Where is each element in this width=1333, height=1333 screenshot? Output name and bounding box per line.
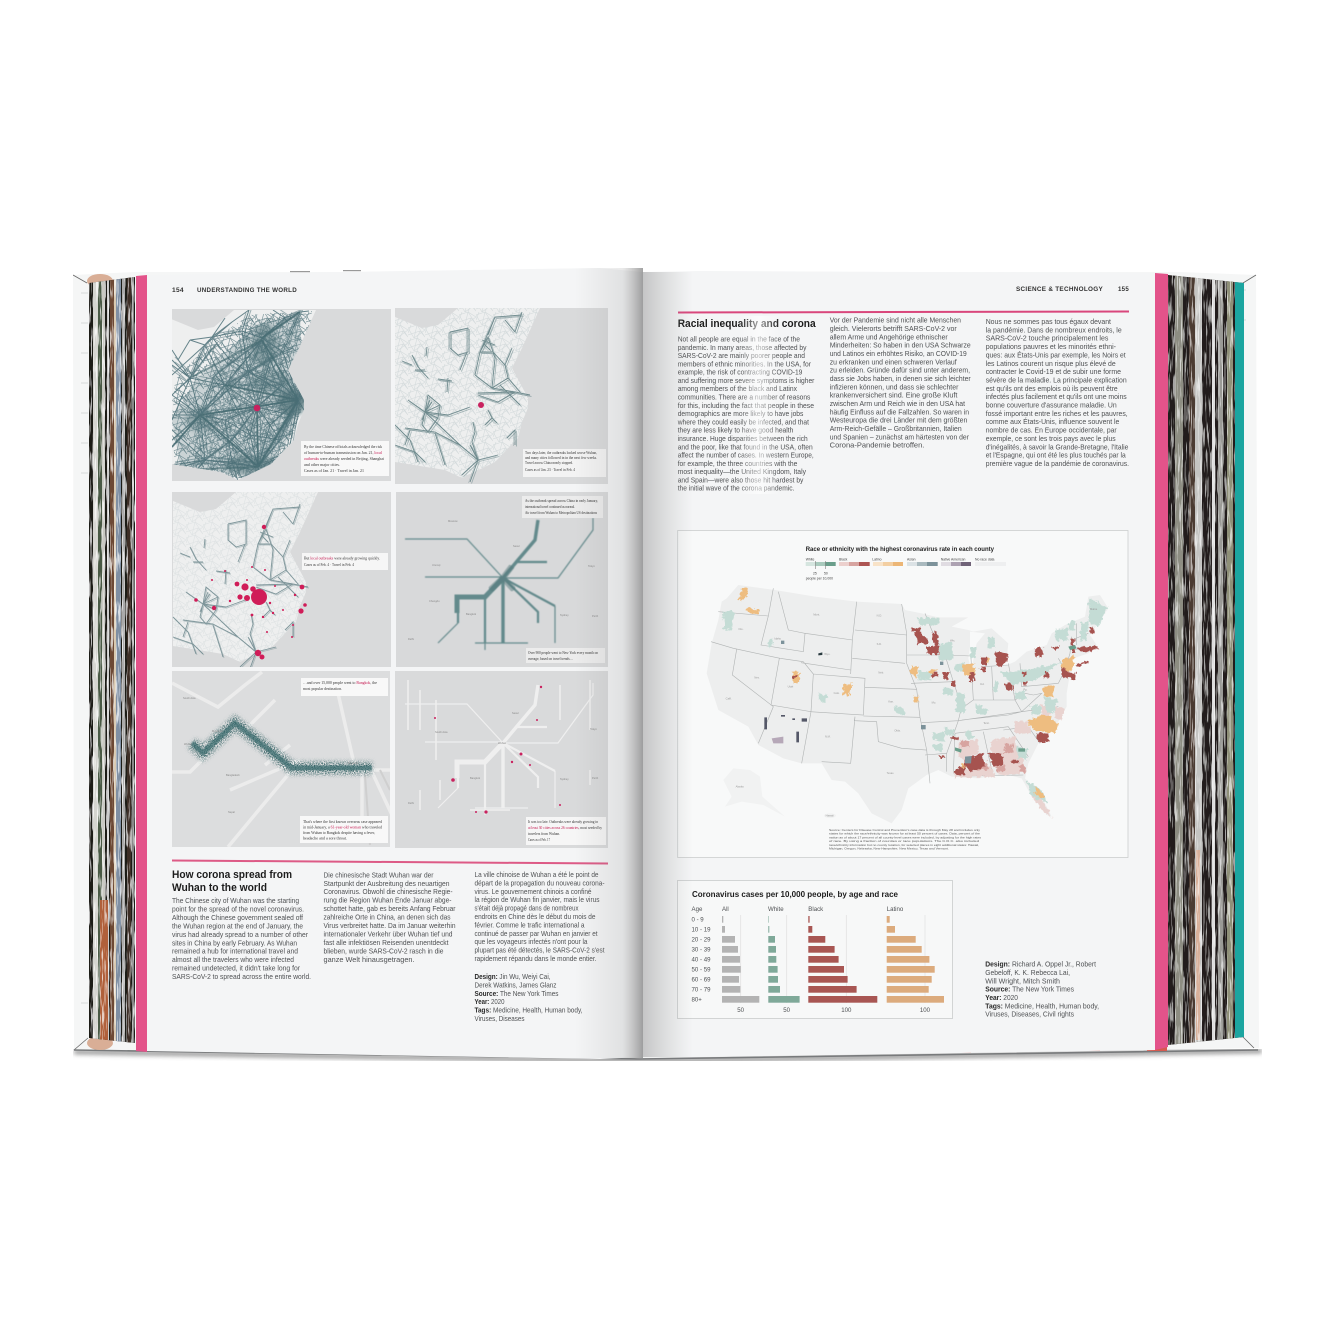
text block: English left: remained undetected, it didn't take long for bbox=[172, 964, 300, 973]
age labels: 0 - 9 bbox=[692, 917, 704, 924]
age labels: 10 - 19 bbox=[692, 927, 711, 934]
text block: English left: almost all the travelers who were infected bbox=[172, 955, 294, 964]
county colours: accents bbox=[764, 641, 1077, 763]
text block: English right: and the poor, like that found in the USA, often bbox=[678, 442, 813, 451]
text block: French right: sévère de la maladie. La principale explication bbox=[986, 376, 1127, 384]
map legend: Latino bbox=[872, 558, 882, 562]
map source note: of race. By using a fraction of counties or race populations. The C.D.C. also included bbox=[829, 839, 979, 843]
text block: German left: fast alle infektiösen Reisenden unentdeckt bbox=[324, 938, 448, 947]
text block: German right: dass sie Jobs haben, in denen sie sich leichter bbox=[830, 374, 971, 383]
credits right: Tags: Medicine, Health, Human body, bbox=[985, 1001, 1099, 1010]
caption 5b: from Wuhan to Bangkok despite having a fever, bbox=[303, 830, 375, 836]
gutter shadow right bbox=[643, 272, 693, 1057]
map panel 4: international flights star: Seoul bbox=[513, 544, 520, 548]
text block: German right: allem Arme und Angehörige ethnischer bbox=[830, 332, 948, 341]
caption 1: outbreaks were already seeded in Beijing, Shanghai bbox=[304, 456, 385, 462]
state labels: Ind. bbox=[980, 682, 985, 686]
chart column heads: All bbox=[722, 906, 729, 913]
caption 1: Cases as of Jan. 21 · Travel in Jan. 21 bbox=[304, 468, 364, 473]
text block: French right: SARS-CoV-2 touche principalement les bbox=[986, 334, 1109, 343]
map panel 6: routes in white, later outbreaks: Seoul bbox=[512, 711, 519, 715]
state labels: Tenn. bbox=[983, 721, 990, 725]
age labels: 40 - 49 bbox=[692, 957, 711, 964]
red outbreak bubbles bbox=[194, 525, 307, 660]
text block: French right: première vague de la pandémie de coronavirus. bbox=[986, 459, 1129, 468]
map panel 4: international flights star: Urumqi bbox=[432, 563, 441, 567]
map legend: 25 bbox=[813, 572, 817, 576]
text block: French right bbox=[986, 317, 1129, 468]
map panel 1: network, Jan 21 bbox=[169, 307, 391, 484]
caption 4a: Air travel from Wuhan to Metropolitan US destinations bbox=[525, 510, 597, 515]
caption 5b: headache and a sore throat. bbox=[303, 836, 347, 840]
state labels: S.D. bbox=[877, 642, 882, 646]
axis values: 50 bbox=[783, 1007, 791, 1014]
text block: French right: est qu'ils ont des emplois où ils peuvent être bbox=[986, 384, 1118, 393]
text block: English left: SARS-CoV-2 to spread across the entire world. bbox=[172, 972, 311, 981]
age labels: 60 - 69 bbox=[692, 977, 711, 984]
text block: German left bbox=[324, 870, 456, 964]
text block: French left: février. Comme le trafic international a bbox=[474, 920, 585, 929]
text block: German left: ganze Welt hinausgetragen. bbox=[324, 955, 414, 964]
map panel 4: international flights star: Perth bbox=[592, 614, 599, 618]
caption 3: Cases as of Feb. 4 · Travel in Feb. 4 bbox=[304, 562, 354, 567]
credits right: Design: Richard A. Oppel Jr., Robert bbox=[985, 960, 1096, 969]
map source note: race/ethnicity information but no county location, for selected places in eight additional states: Hawaii, bbox=[829, 843, 979, 847]
text block: German right: Arm-Reich-Gefälle – Großbritannien, Italien bbox=[830, 424, 962, 433]
chart column heads bbox=[692, 906, 904, 913]
state labels: Idaho bbox=[774, 636, 782, 640]
caption 4b: average, based on travel trends… bbox=[528, 656, 573, 662]
axis values bbox=[737, 1007, 931, 1014]
text block: English right: for this, including the fact that people in these bbox=[678, 401, 814, 410]
text block: English right: where they could easily be infected, and that bbox=[677, 417, 809, 426]
text block: French left: rapidement répandu dans le monde entier. bbox=[474, 954, 596, 963]
map panel 6: routes in white, later outbreaks: Delhi bbox=[408, 801, 414, 805]
text block: English left: The Chinese city of Wuhan was the starting bbox=[172, 896, 299, 905]
map panel 5: route to Bangkok: Wuhan bbox=[184, 742, 193, 746]
credits right: Source: The New York Times bbox=[985, 985, 1074, 994]
text block: French left: La ville chinoise de Wuhan a été le point de bbox=[474, 870, 598, 879]
credits right: Year: 2020 bbox=[985, 993, 1018, 1002]
text block: German left: Startpunkt der Ausbreitung des neuartigen bbox=[324, 879, 450, 888]
text block: French right: Nous ne sommes pas tous égaux devant bbox=[986, 317, 1111, 326]
Lake Michigan bbox=[968, 632, 985, 672]
left page bbox=[147, 268, 643, 1059]
text block: English right: demographics are more likely to have jobs bbox=[678, 409, 804, 418]
map legend: No race data bbox=[975, 558, 995, 562]
state labels: Mont. bbox=[813, 613, 820, 617]
text block: French right: exemple, ce sont les trois pays avec le plus bbox=[986, 434, 1116, 443]
text block: French right: ques: aux États-Unis par exemple, les Noirs et bbox=[986, 350, 1126, 359]
text block: German right: gleich. Vielerorts betrifft SARS-CoV-2 vor bbox=[830, 324, 957, 333]
text block: English left: sites in China by early February. As Wuhan bbox=[172, 938, 297, 947]
text block: German right: und Latinos ein erhöhtes Risiko, an COVID-19 bbox=[830, 349, 967, 358]
credits left: Year: 2020 bbox=[474, 997, 504, 1006]
credits left: Source: The New York Times bbox=[474, 989, 559, 998]
top and bottom colour tabs bbox=[87, 270, 1167, 1055]
caption 2: Cases as of Jan. 23 · Travel in Feb. 4 bbox=[525, 467, 575, 472]
caption 2: and many cities followed in in the next few weeks. bbox=[525, 455, 597, 460]
caption 5b bbox=[300, 816, 388, 843]
map panel 3: local outbreaks with red bubbles bbox=[172, 492, 391, 675]
heading: racial inequality: Racial inequality and corona bbox=[678, 318, 816, 330]
text block: English right: the initial wave of the corona pandemic. bbox=[678, 484, 794, 493]
map panel 4: international flights star bbox=[396, 492, 608, 667]
state labels: Okla. bbox=[894, 729, 901, 733]
bars: white bbox=[768, 916, 800, 1003]
caption 6 bbox=[526, 817, 606, 845]
running head right: SCIENCE & TECHNOLOGY bbox=[1016, 286, 1103, 293]
text block: English right bbox=[677, 334, 815, 493]
text block: French left bbox=[474, 870, 605, 963]
text block: French right: infectés plus facilement et qu'ils ont une moins bbox=[986, 392, 1127, 401]
caption 4a: international travel continued as normal. bbox=[525, 504, 575, 509]
text block: English right: and Spain—were also those hit hardest by bbox=[678, 475, 804, 484]
caption 5a bbox=[301, 678, 388, 696]
map panel 5: route to Bangkok: Bangladesh bbox=[226, 773, 240, 777]
map panel 6: routes in white, later outbreaks: South Asia bbox=[435, 730, 448, 734]
left pink page edge bbox=[136, 275, 147, 1052]
text block: French right: d'inégalités, à savoir la Grande-Bretagne, l'Italie bbox=[986, 442, 1128, 451]
map panel 6: routes in white, later outbreaks: Tokyo bbox=[590, 727, 597, 731]
chart tick lines bbox=[741, 915, 925, 1003]
map legend: Black bbox=[839, 558, 848, 562]
county colours: dark red bbox=[792, 625, 1097, 774]
state labels: Kan. bbox=[888, 700, 894, 704]
running head left: 154 bbox=[172, 287, 184, 294]
state labels: Ore. bbox=[738, 627, 744, 631]
credits left: Derek Watkins, James Glanz bbox=[474, 980, 557, 989]
text block: German left: blieben, wurde SARS-CoV-2 rasch in die bbox=[324, 946, 444, 955]
text block: French left: endroits en Chine dès le début du mois de bbox=[474, 912, 596, 921]
county colours ragged bbox=[722, 587, 1107, 817]
chart column heads: Age bbox=[692, 906, 703, 913]
text block: English right: communities. There are a number of reasons bbox=[678, 392, 811, 402]
text block: German right: krankenversichert sind. Eine große Kluft bbox=[830, 391, 957, 400]
text block: English left: the Wuhan region at the end of January, the bbox=[172, 921, 303, 930]
text block: French right: comme aux États-Unis, influence souvent le bbox=[986, 417, 1119, 426]
text block: French left: plupart pas été détectés, le SARS-CoV-2 s'est bbox=[474, 946, 604, 955]
glossy highlight bbox=[738, 316, 780, 494]
text block: French left: continué de passer par Wuhan en janvier et bbox=[474, 929, 598, 938]
age labels: 30 - 39 bbox=[692, 947, 711, 954]
caption 5b: That's where the first known overseas case appeared bbox=[303, 819, 382, 824]
text block: German right: infizieren können, und dass sie schlechter bbox=[830, 382, 959, 391]
text block: French right: contracter le Covid-19 et de subir une forme bbox=[986, 367, 1121, 376]
credits left bbox=[474, 972, 582, 1023]
credits right: Gebeloff, K. K. Rebecca Lai, bbox=[985, 968, 1070, 977]
text block: German right bbox=[830, 316, 971, 450]
caption 1 bbox=[301, 441, 389, 476]
map panel 4: international flights star: Bangkok bbox=[466, 612, 477, 616]
text block: German right: zwischen Arm und Reich wie in den USA hat bbox=[830, 399, 965, 408]
caption 4a: As the outbreak spread across China in early January, bbox=[525, 498, 598, 504]
state labels: Wyo. bbox=[824, 652, 831, 656]
axis values: 100 bbox=[920, 1007, 931, 1014]
caption 6: Cases as of Feb. 17 bbox=[528, 837, 550, 842]
left page block edges bbox=[89, 275, 135, 1050]
county colours: mid red bbox=[958, 738, 1025, 772]
text block: German right: Vor der Pandemie sind nicht alle Menschen bbox=[830, 316, 961, 325]
axis values: 50 bbox=[737, 1007, 745, 1014]
state labels: N.M. bbox=[825, 734, 831, 738]
right pink page edge bbox=[1155, 273, 1168, 1050]
age labels: 50 - 59 bbox=[692, 967, 711, 974]
text block: English left: Although the Chinese government sealed off bbox=[172, 913, 304, 922]
text block: German right: Corona-Pandemie betroffen. bbox=[830, 441, 924, 450]
chart column heads: Latino bbox=[887, 906, 904, 913]
caption 4b: Over 900 people went to New York every month on bbox=[528, 650, 598, 655]
text block: English right: example, the risk of contracting COVID-19 bbox=[678, 368, 802, 377]
text block: English left: virus had already spread to a number of other bbox=[172, 930, 308, 939]
state borders bbox=[711, 588, 1095, 783]
map geography in zoomed coordinates: Alaska bbox=[736, 785, 744, 789]
age labels: 20 - 29 bbox=[692, 937, 711, 944]
text block: German right: zu erkranken und einen schweren Verlauf bbox=[830, 357, 958, 366]
state labels: Colo. bbox=[834, 691, 840, 695]
text block: French left: la région de Wuhan fin janvier, mais le virus bbox=[474, 895, 600, 904]
map legend: 50 bbox=[824, 572, 828, 576]
county colours: light south bbox=[953, 703, 1063, 817]
text block: English left: remained a hub for international travel and bbox=[172, 947, 298, 956]
caption 2 bbox=[523, 449, 606, 477]
running head right: 155 bbox=[1118, 286, 1129, 293]
text block: English right: pandemic. In many areas, those affected by bbox=[678, 343, 807, 352]
state labels: Nev. bbox=[754, 675, 760, 679]
text block: English right: members of ethnic minorities. In the USA, for bbox=[678, 359, 811, 368]
map source note: Source: Centers for Disease Control and Prevention's case data is through May 28 and includes only bbox=[829, 828, 980, 832]
caption 5a: …and over 15,000 people went to Bangkok, the bbox=[303, 680, 377, 686]
map panel 5: route to Bangkok bbox=[172, 671, 392, 847]
text block: French left: virus. Le gouvernement chinois a confiné bbox=[474, 887, 592, 896]
left rule bbox=[172, 860, 608, 864]
chart column heads: Black bbox=[808, 906, 824, 913]
caption 6: travelers from Wuhan. bbox=[528, 831, 560, 836]
map panel 4: international flights star: Tokyo bbox=[588, 564, 595, 568]
text block: English right: Not all people are equal in the face of the bbox=[678, 334, 800, 344]
caption 6: at least 30 cities across 26 countries, most seeded by bbox=[528, 825, 602, 831]
text block: French left: que les voyageurs infectés n'ont pour la bbox=[474, 937, 588, 946]
panel: US county map bbox=[678, 530, 1128, 858]
county colours: orange bbox=[737, 587, 1073, 798]
heading: how corona spread bbox=[172, 869, 292, 894]
text block: French right: et l'Espagne, qui ont été les plus touchés par la bbox=[986, 451, 1126, 460]
text block: English right: for example, the three countries with the bbox=[678, 459, 797, 468]
text block: German right: und Spanien – zunächst am härtesten von der bbox=[830, 432, 969, 441]
map geography in zoomed coordinates bbox=[707, 585, 1108, 823]
book shadow bbox=[74, 1051, 1262, 1061]
text block: German left: Die chinesische Stadt Wuhan war der bbox=[324, 870, 434, 879]
text block: German right: Westeuropa die drei Länder mit dem größten bbox=[830, 416, 967, 425]
map panel 6: routes in white, later outbreaks: Bangkok bbox=[470, 776, 481, 780]
right page block edges bbox=[1168, 270, 1244, 1050]
text block: German right: zu erleiden. Gründe dafür sind unter anderem, bbox=[830, 366, 970, 375]
text block: French right: populations pauvres et les minorités ethni- bbox=[986, 342, 1116, 351]
age labels: 70 - 79 bbox=[692, 987, 711, 994]
map panel 5: route to Bangkok: Myanmar bbox=[212, 729, 223, 733]
caption 6: It was too late. Outbreaks were already growing in bbox=[528, 819, 598, 824]
state labels: N.D. bbox=[877, 614, 882, 618]
panel: bar chart by age and race bbox=[678, 880, 952, 1018]
map legend: Native American bbox=[941, 558, 966, 562]
state labels: Wis. bbox=[950, 639, 955, 643]
state labels: Pa. bbox=[1023, 688, 1028, 692]
credits left: Tags: Medicine, Health, Human body, bbox=[474, 1006, 582, 1015]
credits right: Will Wright, Mitch Smith bbox=[985, 976, 1060, 985]
map panel 4: international flights star: Sydney bbox=[560, 613, 569, 617]
county colours: light teal bbox=[722, 597, 1107, 802]
text block: English right: and suffering more severe symptoms is higher bbox=[678, 376, 815, 385]
chart column heads: White bbox=[768, 906, 784, 913]
text block: French right: nombre de cas. En Europe occidentale, par bbox=[986, 426, 1117, 435]
heading: how corona spread: How corona spread from bbox=[172, 869, 292, 881]
text block: English right: SARS-CoV-2 are mainly poorer people and bbox=[678, 351, 805, 360]
credits right bbox=[985, 960, 1099, 1019]
map legend: White bbox=[806, 558, 814, 562]
text block: German left: schottet hatte, gab es bereits Anfang Februar bbox=[324, 904, 456, 913]
bars: all bbox=[722, 916, 759, 1003]
map source note: nation as of about 17 percent of all county-level cases were included, by adjusting for the high rates bbox=[829, 835, 981, 839]
text block: English right: among members of the black and Latinx bbox=[678, 384, 797, 393]
map panel 5: route to Bangkok: Nepal bbox=[228, 810, 235, 814]
running head left: UNDERSTANDING THE WORLD bbox=[197, 287, 297, 294]
text block: French right: la pandémie. Dans de nombreux endroits, le bbox=[986, 325, 1122, 334]
heading: how corona spread: Wuhan to the world bbox=[172, 882, 267, 894]
contiguous US land bbox=[707, 585, 1108, 823]
text block: German left: zahlreiche Orte in China, an denen sich das bbox=[324, 913, 451, 922]
caption 1: and other major cities. bbox=[304, 462, 340, 467]
text block: German right: häufig Einfluss auf die Fallzahlen. So waren in bbox=[830, 407, 969, 416]
soft whole page bbox=[73, 268, 1262, 1061]
map source note bbox=[829, 828, 981, 850]
map panel 6: routes in white, later outbreaks: Wuhan bbox=[498, 741, 507, 745]
map panel 6: routes in white, later outbreaks bbox=[395, 671, 608, 848]
caption 1: of human-to-human transmission on Jan. 21, local bbox=[304, 450, 383, 456]
map panel 5: route to Bangkok: South Asia bbox=[183, 696, 196, 700]
map legend bbox=[806, 558, 1006, 580]
map panel 6: routes in white, later outbreaks: Perth bbox=[592, 776, 599, 780]
text block: French right: bonne couverture d'assurance maladie. Un bbox=[986, 400, 1117, 410]
state labels: Mo. bbox=[932, 700, 936, 704]
text block: German right: Minderheiten: So haben in den USA Schwarze bbox=[830, 341, 971, 350]
age labels bbox=[692, 917, 711, 1004]
state labels: Utah bbox=[788, 684, 794, 688]
text block: German left: Virus verbreitet hatte. Da im Januar weiterhin bbox=[324, 921, 456, 930]
state labels: Texas bbox=[887, 771, 894, 775]
text block: French left: départ de la propagation du nouveau corona- bbox=[474, 878, 605, 887]
text block: English left: point for the spread of the novel coronavirus. bbox=[172, 904, 304, 914]
state labels: Calif. bbox=[726, 696, 732, 700]
text block: German left: internationaler Verkehr über Wuhan tief und bbox=[324, 930, 452, 938]
credits left: Viruses, Diseases bbox=[474, 1014, 525, 1023]
caption 2: Travel across China nearly stopped. bbox=[525, 460, 573, 465]
map panel 4: international flights star: Moscow bbox=[448, 519, 458, 523]
right page bbox=[643, 271, 1155, 1057]
caption 4b bbox=[526, 648, 605, 663]
state labels: Maine bbox=[1090, 607, 1098, 611]
text block: English right: insurance. Huge disparities between the rich bbox=[678, 434, 808, 443]
text block: English right: affect the number of cases. In western Europe, bbox=[678, 451, 814, 460]
route particle trail bbox=[192, 723, 372, 768]
state labels bbox=[726, 607, 1098, 775]
caption 3: But local outbreaks were already growing quickly. bbox=[304, 556, 380, 560]
axis values: 100 bbox=[841, 1007, 852, 1014]
credits left: Design: Jin Wu, Weiyi Cai, bbox=[474, 972, 550, 981]
caption 3 bbox=[302, 553, 388, 570]
text block: German left: rung die Region Wuhan Ende Januar abge- bbox=[324, 896, 452, 905]
map title: Race or ethnicity with the highest coronavirus rate in each county bbox=[806, 547, 995, 553]
text block: French right: les Latinos courent un risque plus élevé de bbox=[986, 359, 1116, 368]
caption 1: By the time Chinese officials acknowledged the risk bbox=[304, 444, 382, 449]
map legend: Asian bbox=[907, 558, 916, 562]
book cover bbox=[73, 272, 1259, 1059]
map legend: people per 10,000 bbox=[806, 576, 833, 580]
map geography in zoomed coordinates: Hawaii bbox=[826, 814, 834, 818]
text block: English left bbox=[172, 896, 311, 981]
map source note: states for which the race/ethnicity was known for at least 50 percent of cases. Data, percent of the bbox=[829, 832, 980, 836]
map panel 6: routes in white, later outbreaks: Sydney bbox=[560, 777, 569, 781]
chart title: Coronavirus cases per 10,000 people, by age and race bbox=[692, 889, 898, 899]
map panel 4: international flights star: Chengdu bbox=[429, 599, 440, 603]
map panel 4: international flights star: Delhi bbox=[408, 637, 414, 641]
bars: latino bbox=[887, 916, 944, 1003]
caption 5b: in mid-January, a 61-year-old woman who traveled bbox=[303, 824, 382, 830]
text block: English right: they are less likely to have good health bbox=[678, 426, 793, 435]
map panel 2: two days later bbox=[394, 308, 608, 484]
age labels: 80+ bbox=[692, 997, 702, 1004]
text block: English right: most inequality—the United Kingdom, Italy bbox=[678, 467, 806, 476]
right rule bbox=[678, 312, 1129, 313]
map panel 5: route to Bangkok: Bangkok bbox=[348, 761, 359, 765]
text block: French left: s'était déjà propagé dans de nombreux bbox=[474, 904, 579, 913]
caption 2: Two days later, the outbreaks looked worse Wuhan, bbox=[525, 450, 597, 456]
state labels: Neb. bbox=[878, 670, 884, 674]
caption 5a: most popular destination. bbox=[303, 686, 342, 691]
text block: French right: fossé important entre les riches et les pauvres, bbox=[986, 409, 1128, 418]
bars: black bbox=[808, 916, 877, 1003]
text block: German left: Coronavirus. Obwohl die chinesische Regie- bbox=[324, 887, 453, 896]
caption 4a bbox=[522, 496, 603, 518]
credits right: Viruses, Diseases, Civil rights bbox=[985, 1010, 1074, 1019]
map source note: Michigan, Oregon, Nebraska, New Hampshire, New Mexico, Texas and Vermont. bbox=[829, 846, 949, 850]
Alaska and Hawaii bbox=[723, 768, 836, 818]
gutter shadow left bbox=[575, 268, 643, 1058]
